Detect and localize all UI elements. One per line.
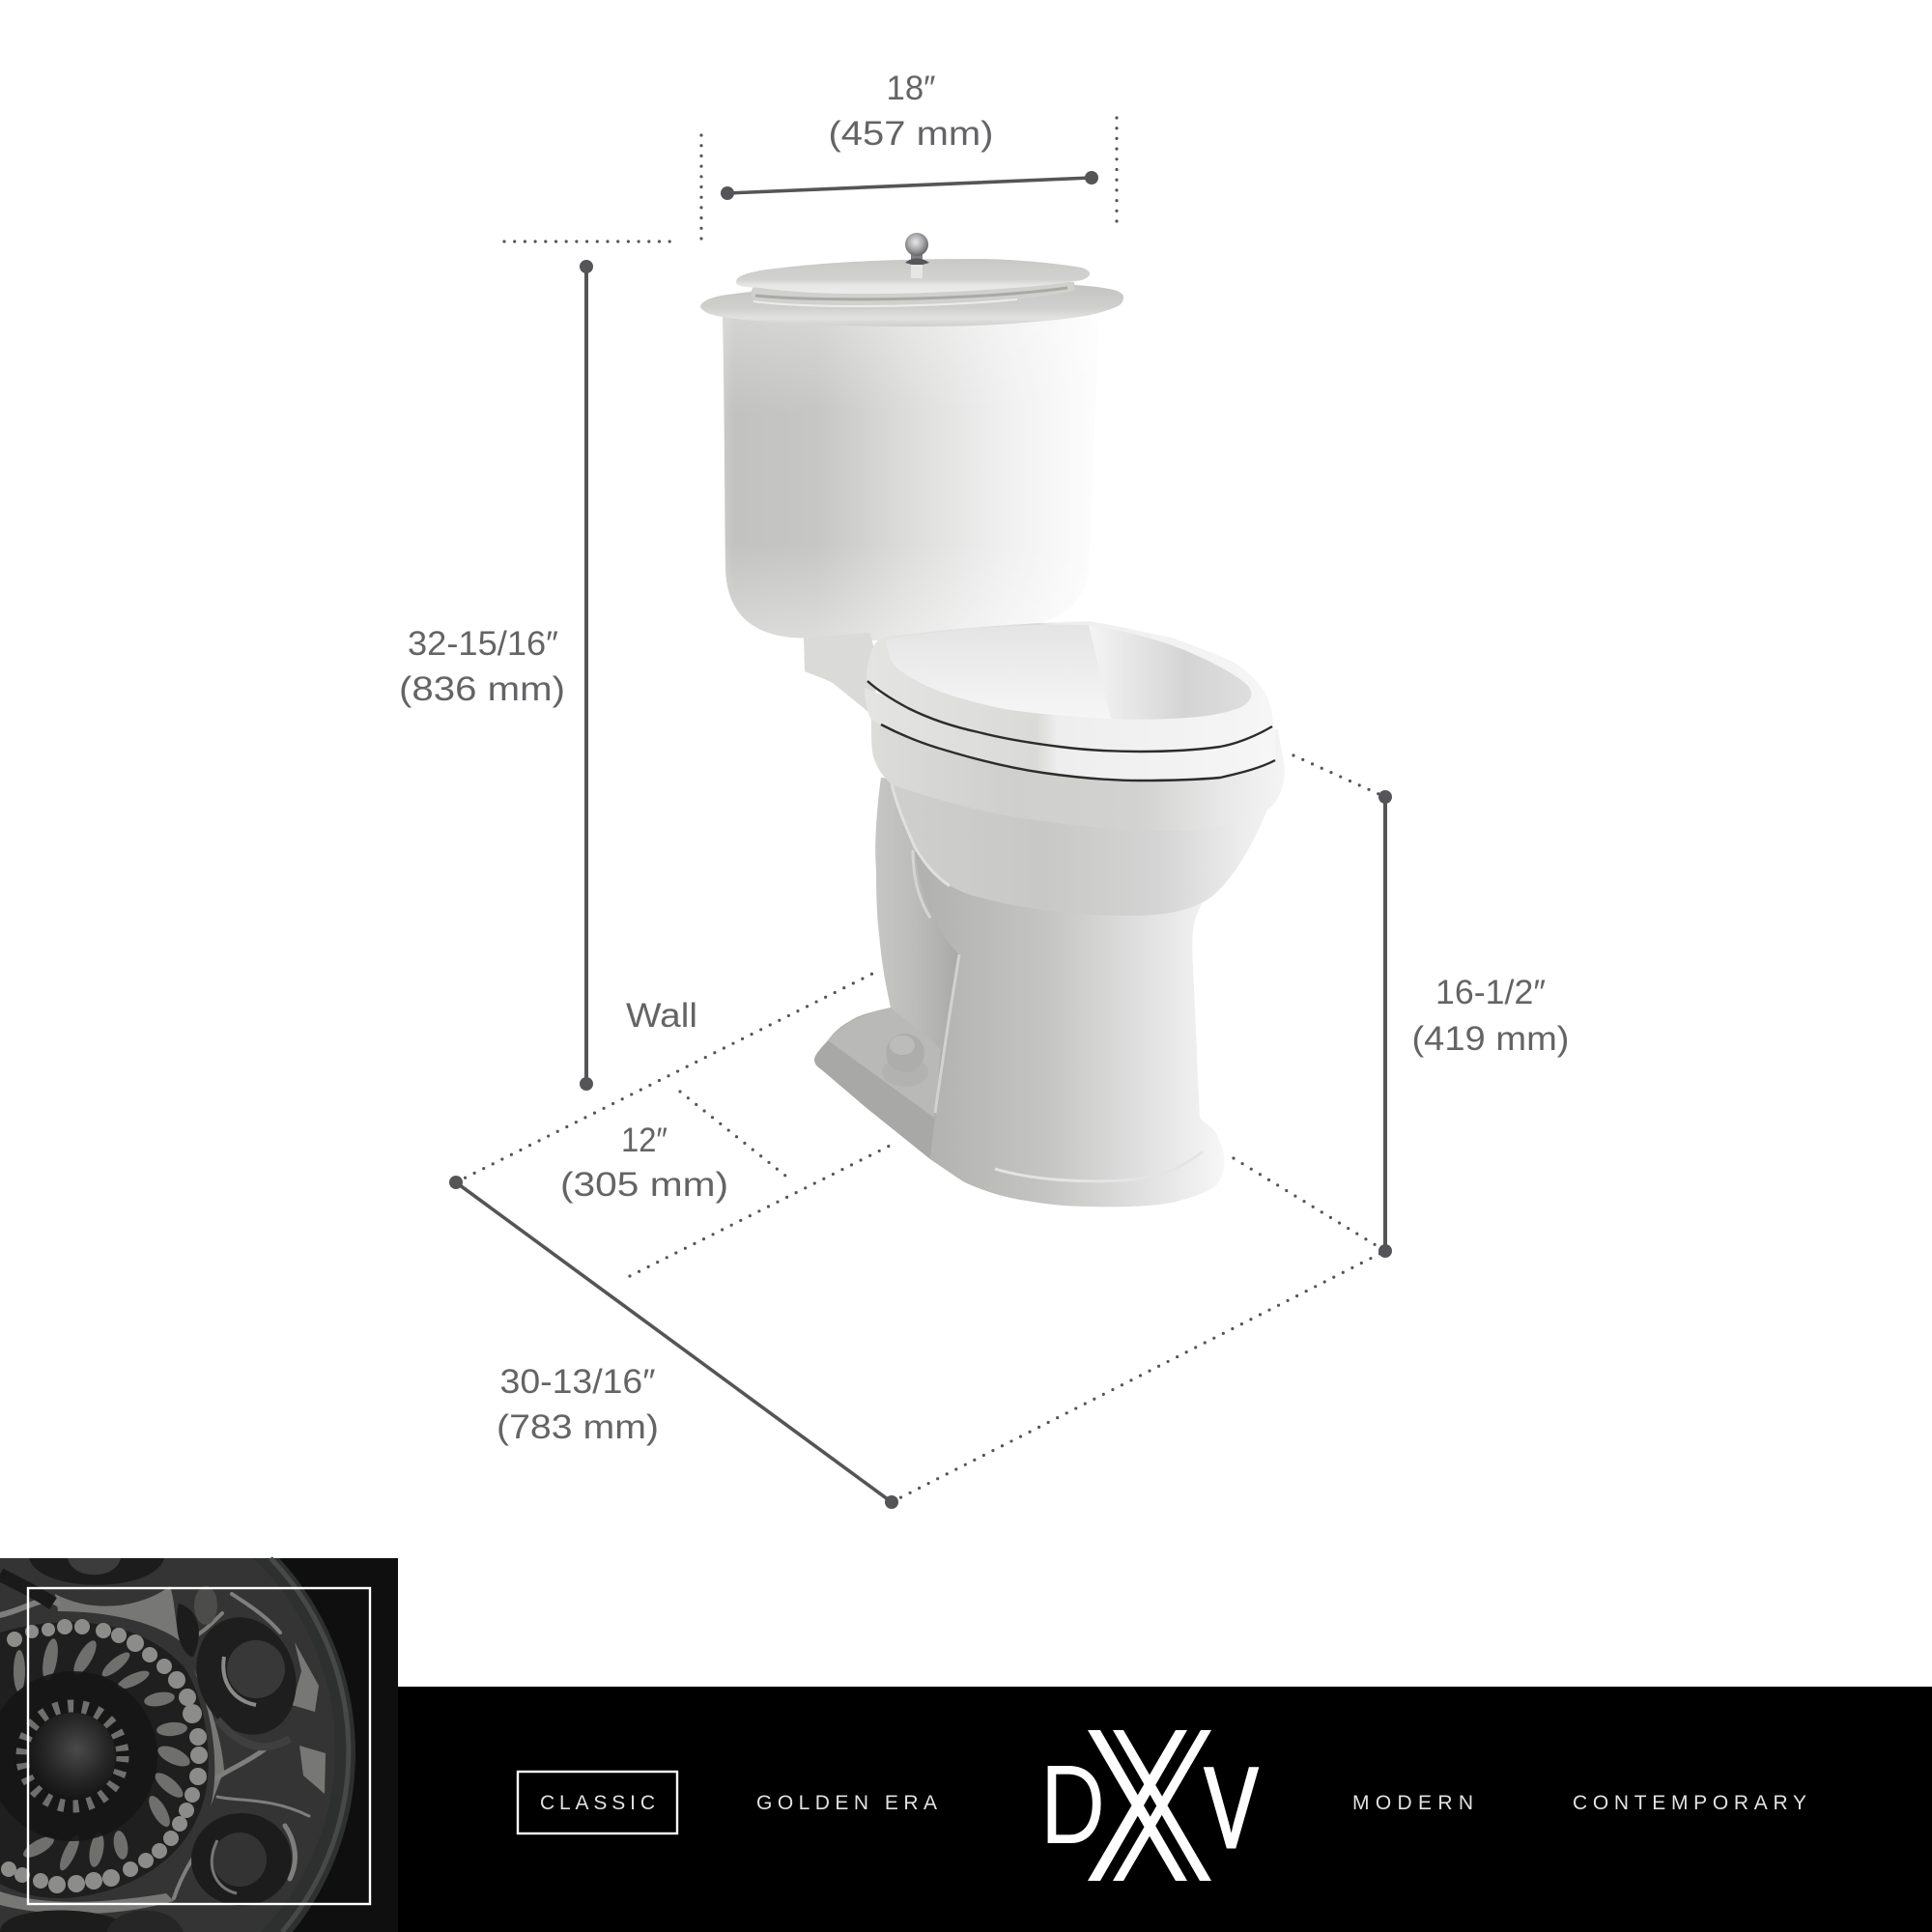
bowl: [871, 720, 1285, 916]
dimension: seat height 16-1/2 inch: [1234, 755, 1569, 1258]
tank lid: [736, 259, 1090, 294]
bead ring: [1, 1619, 208, 1893]
trapway: [875, 778, 959, 1063]
white inset frame: [28, 1588, 370, 1904]
nav: classic selected: CLASSIC: [540, 1792, 655, 1814]
light gaps between relief: [0, 1586, 326, 1914]
dimension: depth 30-13/16 inch: 30-13/16″: [500, 1363, 655, 1401]
nav: golden era: GOLDEN ERA: [756, 1792, 937, 1814]
nav: contemporary: CONTEMPORARY: [1573, 1792, 1806, 1814]
dimension: height 32-15/16 inch: 32-15/16″: [408, 625, 558, 663]
scroll: upper right: [177, 1586, 312, 1748]
light leaves: [14, 1637, 193, 1873]
dimension: width 18 inch: 18″: [887, 70, 935, 107]
nav: modern: MODERN: [1352, 1792, 1473, 1814]
pedestal: [913, 850, 1224, 1207]
dimension: width 18 inch: [701, 70, 1117, 240]
tank knob: [905, 233, 929, 278]
toilet tank: [700, 233, 1123, 640]
tank connector: [804, 633, 877, 717]
panel: ornament medallion: [0, 1558, 398, 1932]
dimension: rough-in 12 inch: 12″: [621, 1122, 668, 1159]
dimension: height 32-15/16 inch: (836 mm): [399, 670, 565, 708]
scroll: lower right: [191, 1813, 292, 1906]
tank rim: [700, 285, 1123, 327]
dimension: width 18 inch: (457 mm): [829, 115, 993, 153]
logo: DXV: V: [1205, 1744, 1258, 1871]
logo: DXV: [1040, 1730, 1258, 1881]
logo: DXV: D: [1040, 1743, 1105, 1867]
dimension: rough-in 12 inch: (305 mm): [560, 1166, 728, 1204]
scroll: top: [0, 1558, 164, 1604]
toilet base plate: [814, 1008, 995, 1181]
dimension: seat height 16-1/2 inch: 16-1/2″: [1435, 974, 1546, 1011]
dimension: depth 30-13/16 inch: (783 mm): [497, 1408, 659, 1446]
dimension: rough-in 12 inch: [456, 970, 890, 1276]
scroll: bottom: [0, 1911, 184, 1932]
mounting bolt: [882, 1034, 928, 1087]
dimension: seat height 16-1/2 inch: (419 mm): [1412, 1020, 1569, 1058]
toilet product illustration: [700, 233, 1285, 1207]
central dome with rays: [0, 1671, 157, 1841]
black footer bar: [0, 1687, 1932, 1932]
dimension: height 32-15/16 inch: [399, 242, 670, 1091]
medallion disc: [0, 1558, 355, 1932]
wall label: Wall: [626, 997, 697, 1035]
dimension: depth 30-13/16 inch: [449, 1176, 1385, 1509]
toilet lid: [867, 621, 1273, 752]
inner ring below lid: [751, 282, 1075, 306]
bowl rim band: [871, 720, 1285, 831]
nav: classic selected: [518, 1772, 677, 1833]
seat ring: [865, 688, 1276, 781]
